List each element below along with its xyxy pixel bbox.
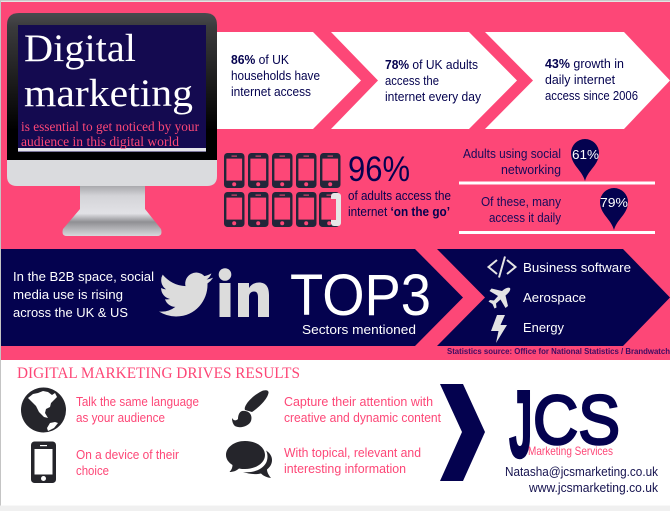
icon: linkedin <box>219 268 269 317</box>
panel: B2B social media <box>1 249 463 346</box>
stat arrow: households: internet access <box>231 85 311 99</box>
stat arrow: households <box>217 32 361 129</box>
stat arrow: households: households have <box>231 69 320 83</box>
contact details <box>505 465 659 495</box>
stat: 96 percent: 96% <box>348 150 410 189</box>
stat arrow: daily adults <box>331 32 517 129</box>
text: same language: as your audience <box>76 411 165 425</box>
text: device: choice <box>76 464 109 478</box>
panel: B2B social media: across the UK & US <box>13 305 128 320</box>
monitor stand <box>62 186 162 236</box>
stat arrow: growth: 43% growth in <box>545 57 624 71</box>
panel: B2B social media: media use is rising <box>13 287 123 302</box>
stat arrow: growth <box>485 32 670 129</box>
label: energy: Energy <box>523 320 564 335</box>
TOP3 heading: TOP3 <box>290 263 431 328</box>
pin: 79 percent <box>600 188 628 230</box>
text: topical: interesting information <box>284 462 406 476</box>
contact details: Natasha@jcsmarketing.co.uk <box>505 465 659 479</box>
icon: paint brush <box>232 390 269 427</box>
stat arrow: growth: daily internet <box>545 73 616 87</box>
text: topical: With topical, relevant and <box>284 446 421 460</box>
stat arrow: daily adults: internet every day <box>385 90 482 104</box>
text: device <box>76 448 179 478</box>
title: Digital <box>24 27 136 70</box>
icon: smartphone <box>31 442 56 483</box>
icon: twitter bird <box>159 273 213 316</box>
social networking stat: Adults using social <box>463 147 561 161</box>
daily access stat: Of these, many <box>481 195 562 209</box>
title <box>24 27 193 115</box>
icon: desktop monitor with title <box>7 13 217 236</box>
pink top panel <box>1 2 670 360</box>
logo tagline: Marketing Services <box>528 444 613 458</box>
label: aerospace: Aerospace <box>523 290 586 305</box>
icon: plane <box>488 288 510 308</box>
contact details: www.jcsmarketing.co.uk <box>528 481 659 495</box>
daily access stat: access it daily <box>489 211 562 225</box>
stat: 96 percent: internet ‘on the go’ <box>348 205 450 219</box>
source note: Statistics source: Office for National Statistics / Brandwatch <box>447 347 670 356</box>
subtitle: audience in this digital world <box>21 134 179 149</box>
pin: 79 percent: 79% <box>600 195 628 210</box>
text: same language: Talk the same language <box>76 395 199 409</box>
text: same language <box>76 395 199 425</box>
daily access stat <box>459 188 655 234</box>
label: business software: Business software <box>523 260 631 275</box>
text: attention <box>284 395 442 425</box>
logo: JCS: CS <box>533 381 620 459</box>
panel: top sectors <box>437 249 670 346</box>
stat: 96 percent <box>348 150 451 219</box>
icon: code <box>488 256 516 278</box>
pin: 61 percent: 61% <box>572 147 599 162</box>
stat arrow: daily adults: 78% of UK adults <box>385 58 478 72</box>
monitor bezel <box>7 13 217 160</box>
icon: lightning bolt <box>491 315 507 343</box>
heading: drives results: DIGITAL MARKETING DRIVES RESULTS <box>17 365 300 382</box>
logo: JCS: J <box>509 370 532 478</box>
pin: 61 percent <box>571 139 599 181</box>
caption: sectors mentioned: Sectors mentioned <box>302 322 416 337</box>
text: attention: creative and dynamic content <box>284 411 442 425</box>
stat: 96 percent: of adults access the <box>348 189 451 203</box>
text: device: On a device of their <box>76 448 179 462</box>
subtitle <box>21 119 199 149</box>
subtitle: is essential to get noticed by your <box>21 119 199 134</box>
icon: globe <box>21 388 66 432</box>
logo: JCS <box>509 370 620 478</box>
panel: B2B social media: In the B2B space, social <box>13 269 154 284</box>
stat arrow: households: 86% of UK <box>231 53 290 67</box>
text: attention: Capture their attention with <box>284 395 433 409</box>
social networking stat <box>459 139 655 184</box>
icon: speech bubbles <box>226 441 272 478</box>
monitor screen <box>18 25 206 152</box>
icon: phone grid <box>224 153 341 227</box>
monitor chin <box>7 160 217 186</box>
stat arrow: growth: access since 2006 <box>545 89 638 103</box>
stat arrow: daily adults: access the <box>385 74 439 88</box>
text: topical <box>284 446 421 476</box>
title: marketing <box>24 72 193 115</box>
social networking stat: networking <box>501 163 561 177</box>
arrow: large chevron <box>440 384 485 481</box>
